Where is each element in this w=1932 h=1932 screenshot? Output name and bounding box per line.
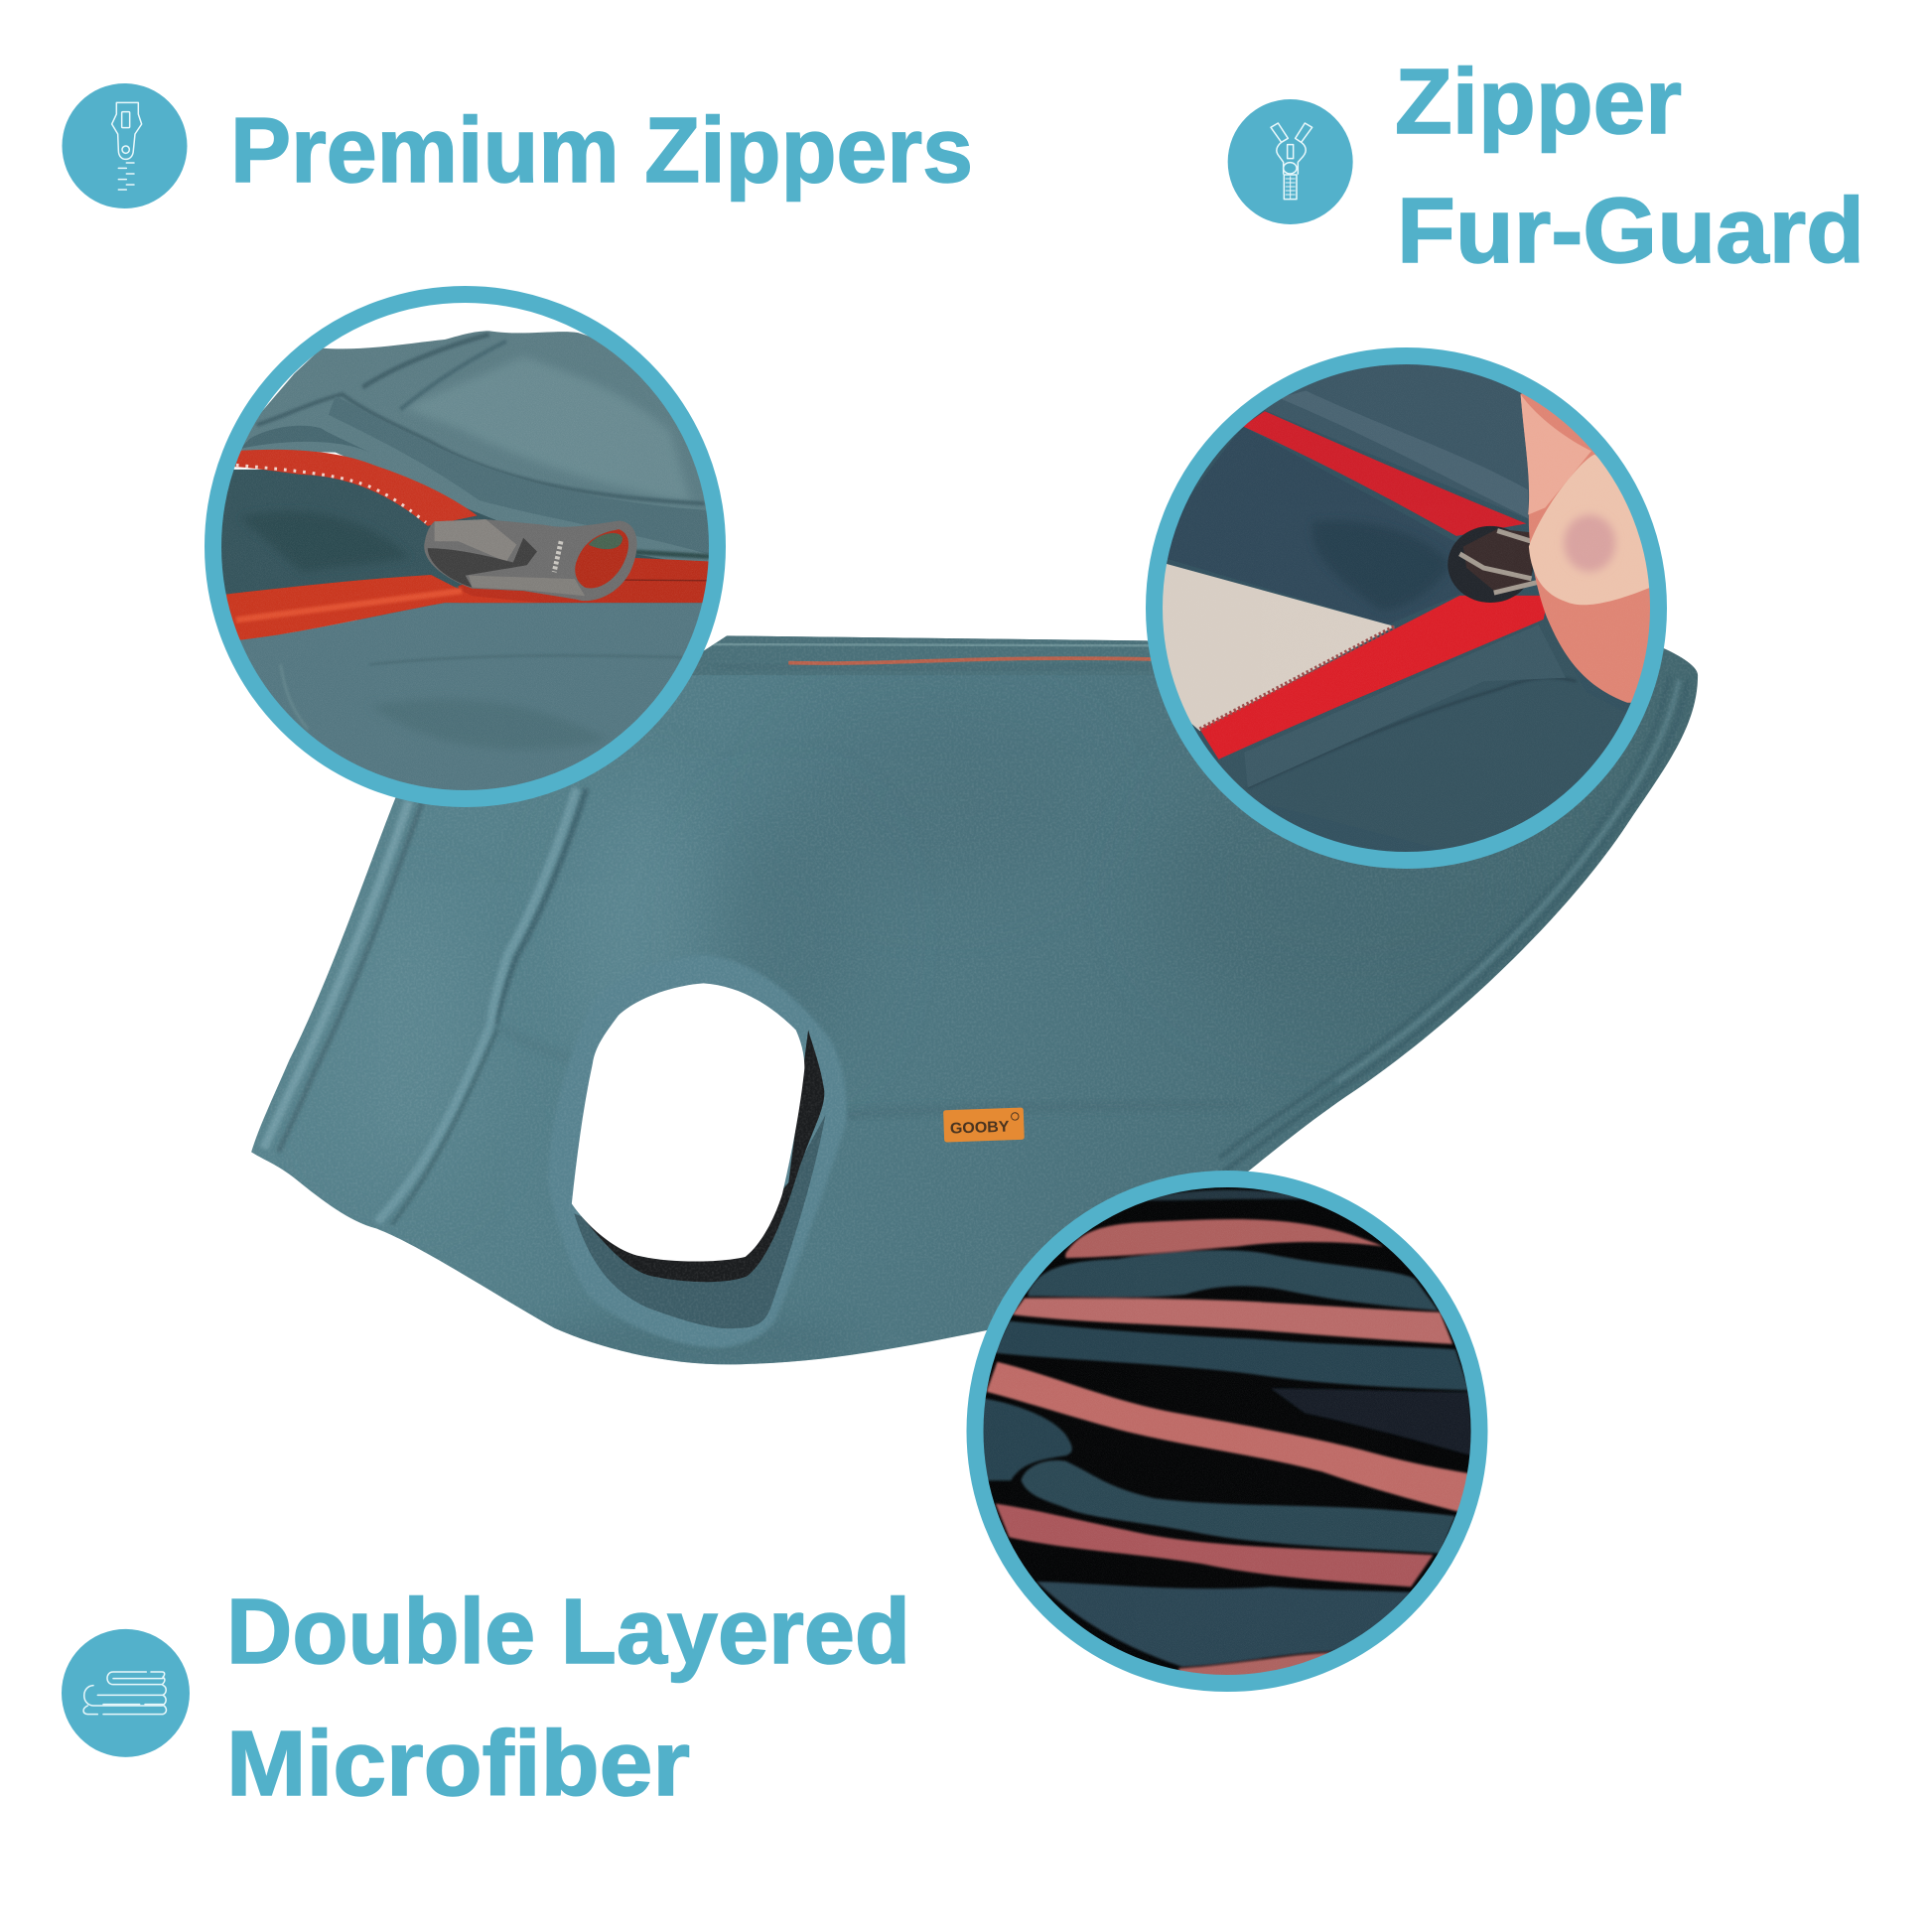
red zipper tape upper [1243,411,1526,536]
teal ring [1154,355,1658,860]
lower fabric [1217,618,1655,870]
navy layer 3 [1022,1460,1455,1553]
deep navy shadow layer [1271,1388,1472,1455]
icon: folded towels [62,1629,190,1757]
upper fabric folds [240,331,709,562]
close-up image: layered microfiber stack [963,1162,1499,1718]
navy pocket [1163,426,1483,624]
lower fabric [232,603,718,791]
dark pocket between zipper tapes [215,476,431,596]
fabric top [1244,351,1535,522]
icon: zipper pull [62,83,187,208]
teal ring [975,1179,1479,1684]
heading: Double Layered Microfiber [226,1580,910,1815]
teal ring [212,294,717,798]
soft-edged layers [977,1190,1472,1679]
orange zipper peek [788,658,1152,663]
close-up image: fingers pulling zipper [1142,338,1689,894]
shoulder seam [495,788,587,1026]
navy left fold [977,1397,1072,1480]
panel: double layer close-up circle [963,1162,1499,1718]
right zipper tape behind the pull [459,555,718,603]
fleece shading and seams [238,628,1704,1380]
leg hole rim [548,955,847,1348]
heading: Double Layered Microfiber: Double Layered [226,1580,910,1683]
metal zipper pull [424,519,637,601]
left collar double seam [278,801,423,1152]
panel: zipper pull close-up circle [199,278,735,814]
zipper slider [1448,526,1533,603]
navy layer 2 [996,1321,1469,1390]
pink layer 3 [987,1362,1469,1514]
finger skin [1521,373,1689,703]
navy layer 4 [1036,1582,1411,1667]
brand label: GOOBY [943,1107,1025,1143]
collar top band [690,633,1159,675]
heading: Zipper Fur-Guard: Fur-Guard [1397,179,1864,282]
red zipper tape lower [226,575,540,640]
heading: Double Layered Microfiber: Microfiber [226,1712,690,1815]
navy layer sliver at top [1141,1190,1325,1200]
fleece body [251,635,1698,1364]
cream lining [1156,561,1395,731]
icon: open zipper [1228,99,1353,224]
inner lining teal [574,1115,825,1328]
pink layer 5 [1178,1652,1332,1679]
pink layer 1 [1065,1219,1384,1258]
heading: Zipper Fur-Guard [1395,50,1864,282]
heading: Premium Zippers: Premium Zippers [230,98,973,202]
black lining band [572,1030,824,1282]
close-up image: zipper on fleece [221,330,709,790]
red zipper tape upper [234,450,478,526]
red zipper tape lower [1200,596,1549,759]
navy layer 1 [1028,1250,1439,1311]
pink layer 4 [996,1504,1434,1587]
brand label: GOOBY: GOOBY [950,1119,1010,1138]
thumb tip [1529,455,1655,605]
right neck double hem [1222,798,1636,1171]
leg hole opening [572,983,804,1261]
pink layer 2 [1013,1298,1452,1344]
garment: teal fleece dog vest [238,628,1704,1380]
heading: Zipper Fur-Guard: Zipper [1395,50,1682,153]
panel: fur-guard close-up circle [1142,338,1689,894]
base under zipper area [212,470,718,620]
